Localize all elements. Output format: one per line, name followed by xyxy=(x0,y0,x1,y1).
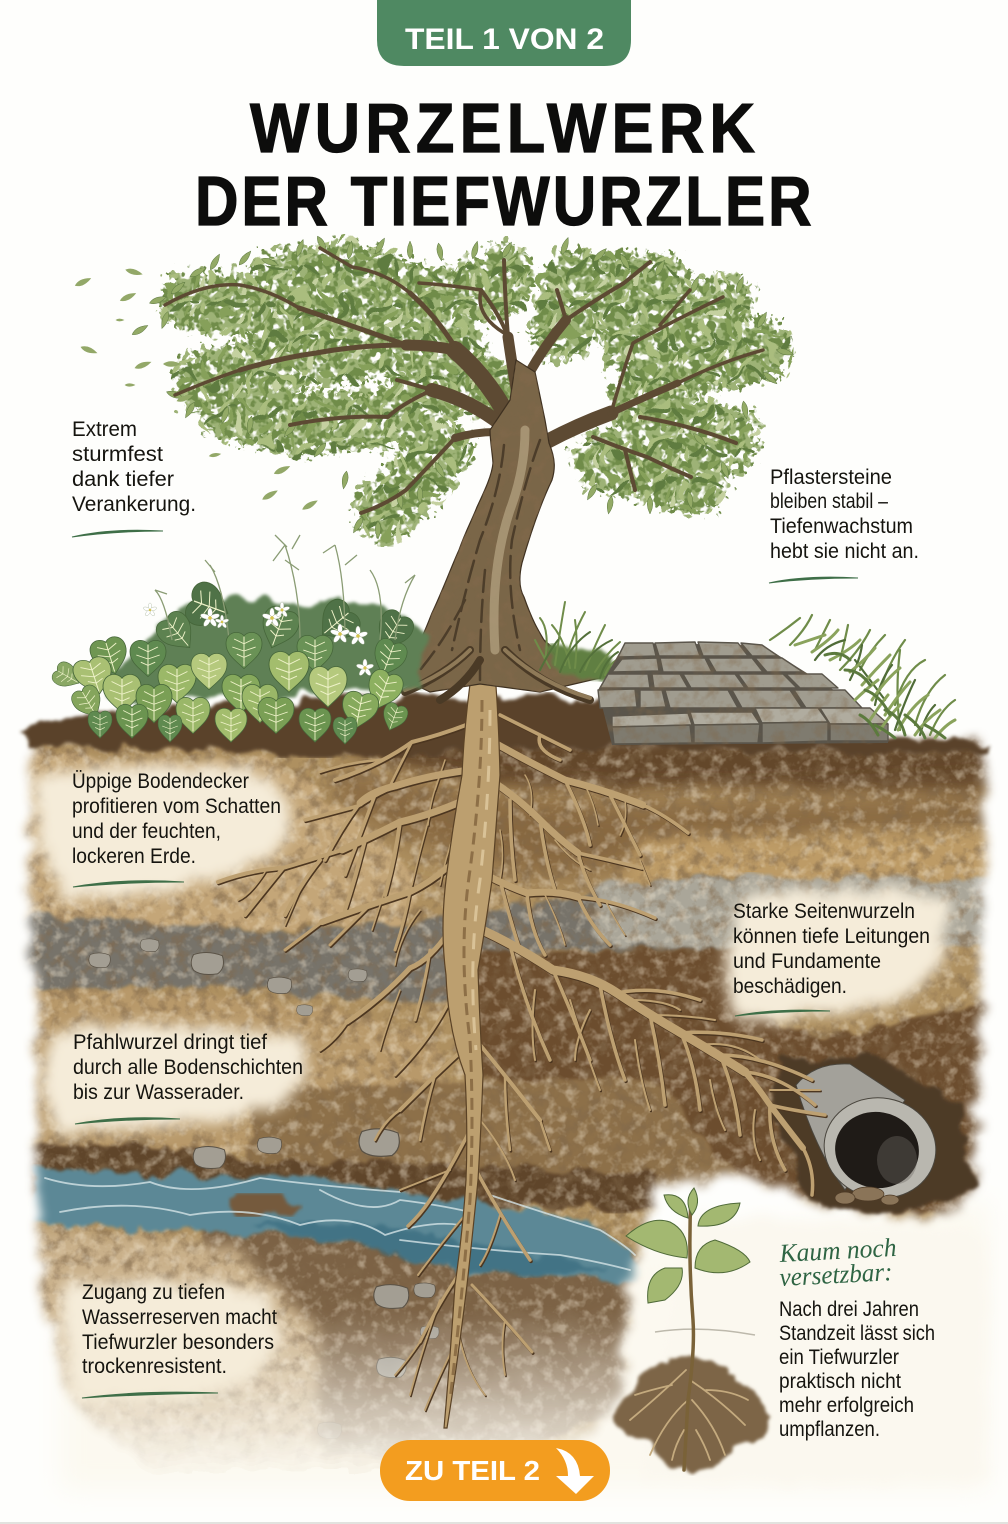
tree roots xyxy=(218,680,826,1428)
button label: ZU TEIL 2 xyxy=(405,1455,540,1486)
layer: topsoil dark band xyxy=(345,733,990,800)
pipe body xyxy=(796,1064,905,1190)
label: transplant note: Nach drei Jahren xyxy=(779,1297,919,1321)
canopy foliage xyxy=(190,272,760,510)
taproot shading xyxy=(450,700,482,1400)
tab label: TEIL 1 VON 2 xyxy=(405,23,604,56)
ground cover plant xyxy=(49,535,425,744)
layer: gravel xyxy=(20,876,740,1005)
label: ground cover xyxy=(72,769,281,887)
layer: brown mid xyxy=(470,948,1000,1230)
label: ground cover: lockeren Erde. xyxy=(72,844,196,868)
title: WURZELWERK xyxy=(250,90,755,168)
pipe rubble xyxy=(770,1055,975,1215)
label: side roots: Starke Seitenwurzeln xyxy=(733,899,915,923)
surface soil strip xyxy=(22,695,990,755)
falling leaves xyxy=(74,267,319,512)
bottom edge line xyxy=(0,1522,1008,1524)
drainage pipe xyxy=(770,1055,975,1215)
sapling soil grain xyxy=(630,1370,748,1460)
sapling stem xyxy=(684,1195,693,1470)
label: transplant note: Standzeit lässt sich xyxy=(779,1321,935,1345)
pipe opening xyxy=(816,1089,944,1207)
white flowers xyxy=(143,602,374,677)
soil cross-section xyxy=(19,730,996,1469)
root flares xyxy=(405,650,590,700)
soil grain dark xyxy=(24,745,988,1438)
label: transplant note: mehr erfolgreich xyxy=(779,1393,914,1417)
label: paving stones: hebt sie nicht an. xyxy=(770,539,919,563)
heading: transplant note: versetzbar: xyxy=(779,1257,893,1292)
label: side roots: und Fundamente xyxy=(733,949,881,973)
sapling illustration xyxy=(615,1188,772,1470)
label: taproot: Pfahlwurzel dringt tief xyxy=(73,1030,267,1054)
label: taproot xyxy=(73,1030,303,1124)
cream wash lower area xyxy=(60,1200,990,1490)
canopy edge leaves xyxy=(131,235,794,539)
sapling soil ball xyxy=(615,1355,772,1470)
heading: transplant note xyxy=(778,1233,897,1292)
button: next part xyxy=(380,1440,610,1501)
label: ground cover: und der feuchten, xyxy=(72,819,221,843)
label: transplant note: praktisch nicht xyxy=(779,1369,901,1393)
cream label backing blobs xyxy=(38,765,985,1480)
paving stones xyxy=(596,640,890,746)
label: side roots: können tiefe Leitungen xyxy=(733,924,930,948)
label: transplant note: umpflanzen. xyxy=(779,1417,880,1441)
label: ground cover: profitieren vom Schatten xyxy=(72,794,281,818)
soil grain light xyxy=(27,734,989,1450)
title xyxy=(195,90,812,240)
heading tab xyxy=(377,0,631,66)
heart leaves xyxy=(49,632,410,744)
layer: deep soil xyxy=(200,1228,636,1448)
label: paving stones xyxy=(769,465,919,583)
trunk bark xyxy=(420,361,592,692)
label: taproot: bis zur Wasserader. xyxy=(73,1080,244,1104)
rocks xyxy=(89,939,439,1439)
label: water reserves xyxy=(82,1280,277,1398)
label: storm resistance xyxy=(72,417,196,537)
taproot xyxy=(443,680,500,1428)
label: water reserves: Tiefwurzler besonders xyxy=(82,1330,274,1354)
branches xyxy=(165,248,763,513)
label: water reserves: Zugang zu tiefen xyxy=(82,1280,225,1304)
label: storm resistance: sturmfest xyxy=(72,442,163,466)
label: storm resistance: Extrem xyxy=(72,417,137,441)
grass clump right xyxy=(770,615,955,738)
back leaves xyxy=(152,579,418,659)
sapling ground line xyxy=(655,1329,755,1335)
label: water reserves: Wasserreserven macht xyxy=(82,1305,277,1329)
label: transplant note xyxy=(779,1297,935,1441)
label: paving stones: Pflastersteine xyxy=(770,465,892,489)
grass clump near tree xyxy=(535,602,628,680)
foliage back xyxy=(100,596,425,700)
tree xyxy=(74,235,794,700)
flower stalks xyxy=(155,535,415,650)
label: storm resistance: Verankerung. xyxy=(72,492,196,516)
label: side roots xyxy=(733,899,930,1016)
label: taproot: durch alle Bodenschichten xyxy=(73,1055,303,1079)
icon: curved arrow xyxy=(556,1448,594,1494)
label: transplant note: ein Tiefwurzler xyxy=(779,1345,899,1369)
label: ground cover: Üppige Bodendecker xyxy=(72,769,249,793)
heading: transplant note: Kaum noch xyxy=(778,1233,897,1268)
label: paving stones: Tiefenwachstum xyxy=(770,514,913,538)
title: DER TIEFWURZLER xyxy=(195,162,812,240)
trunk xyxy=(395,360,600,692)
label: paving stones: bleiben stabil – xyxy=(770,489,888,513)
label: storm resistance: dank tiefer xyxy=(72,467,174,491)
label: water reserves: trockenresistent. xyxy=(82,1354,227,1378)
sapling leaves xyxy=(626,1188,750,1303)
water vein xyxy=(30,1170,650,1285)
label: side roots: beschädigen. xyxy=(733,974,847,998)
